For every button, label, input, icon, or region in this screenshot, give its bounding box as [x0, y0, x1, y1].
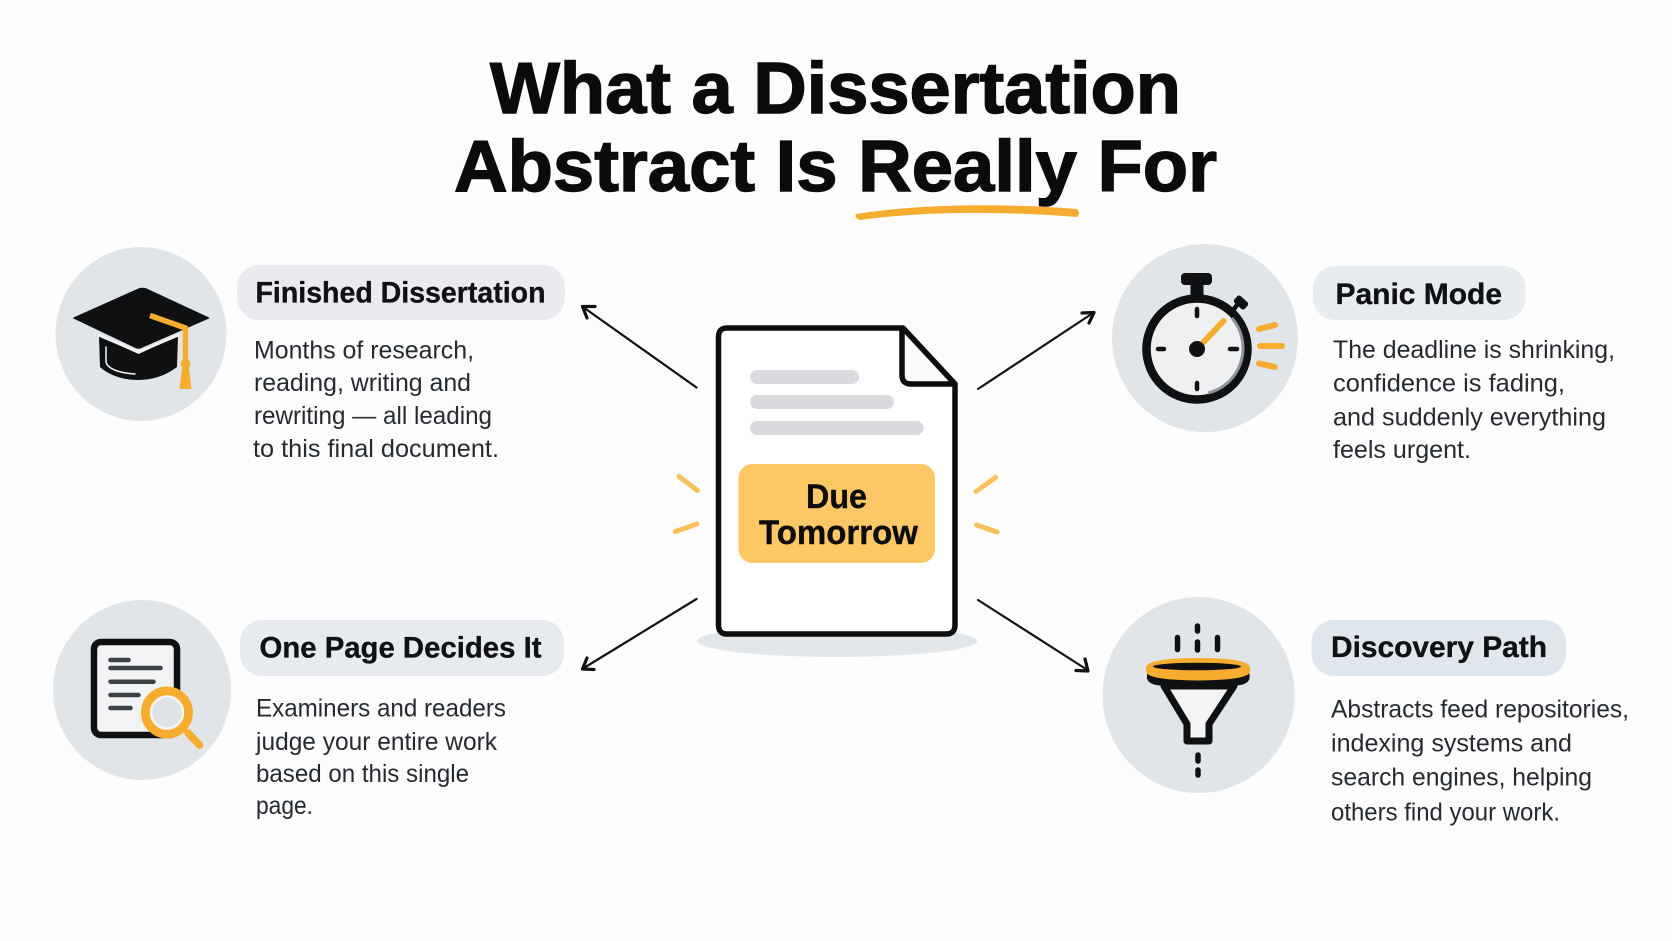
icon: stopwatch: [1112, 244, 1298, 432]
arrow: to one page decides it: [582, 599, 696, 670]
heading pill: [240, 620, 564, 676]
document shadow: [697, 625, 977, 657]
body text: Examiners and readers: [256, 694, 506, 722]
body text: [255, 694, 506, 820]
body text: rewriting — all leading: [254, 402, 492, 430]
body text: Months of research,: [254, 336, 474, 364]
body text: judge your entire work: [255, 728, 497, 756]
panel: one page decides it: [53, 600, 564, 820]
title: [454, 49, 1217, 220]
panel: panic mode: [1112, 244, 1615, 464]
arrow: to discovery path: [978, 600, 1088, 671]
body text: others find your work.: [1331, 798, 1560, 826]
heading pill: [1313, 266, 1526, 320]
body text: [253, 336, 499, 463]
page fold: [902, 328, 955, 384]
body text: to this final document.: [253, 435, 499, 463]
body text: indexing systems and: [1331, 730, 1572, 758]
document page: [718, 328, 955, 634]
heading pill: Finished Dissertation: [256, 276, 546, 310]
due tomorrow badge: Tomorrow: [759, 514, 919, 552]
body text: based on this single: [256, 760, 469, 788]
body text: page.: [256, 792, 313, 820]
heading pill: [237, 265, 565, 320]
body text: reading, writing and: [254, 369, 471, 397]
icon: document with magnifier: [53, 600, 231, 780]
placeholder text lines: [750, 370, 924, 435]
arrow: to finished dissertation: [582, 306, 696, 388]
central document: [676, 328, 997, 657]
body text: search engines, helping: [1331, 764, 1592, 792]
body text: feels urgent.: [1333, 436, 1471, 464]
heading pill: [1312, 620, 1566, 676]
heading pill: Discovery Path: [1331, 631, 1547, 664]
urgency sparks: [676, 476, 997, 532]
title underline accent: [856, 205, 1079, 220]
body text: The deadline is shrinking,: [1333, 336, 1615, 364]
panel: discovery path: [1102, 597, 1629, 826]
body text: Abstracts feed repositories,: [1331, 696, 1629, 724]
body text: [1331, 696, 1629, 826]
body text: and suddenly everything: [1333, 404, 1606, 432]
due tomorrow badge: [738, 464, 935, 563]
body text: confidence is fading,: [1333, 370, 1565, 398]
icon: graduation cap: [56, 247, 226, 421]
panel: finished dissertation: [56, 247, 565, 463]
arrow: to panic mode: [978, 312, 1094, 389]
due tomorrow badge: Due: [806, 478, 867, 516]
heading pill: Panic Mode: [1336, 278, 1502, 311]
title: Abstract Is Really For: [454, 127, 1217, 207]
body text: [1333, 336, 1615, 464]
title: What a Dissertation: [490, 49, 1181, 129]
icon: funnel: [1102, 597, 1294, 793]
heading pill: One Page Decides It: [260, 631, 542, 664]
